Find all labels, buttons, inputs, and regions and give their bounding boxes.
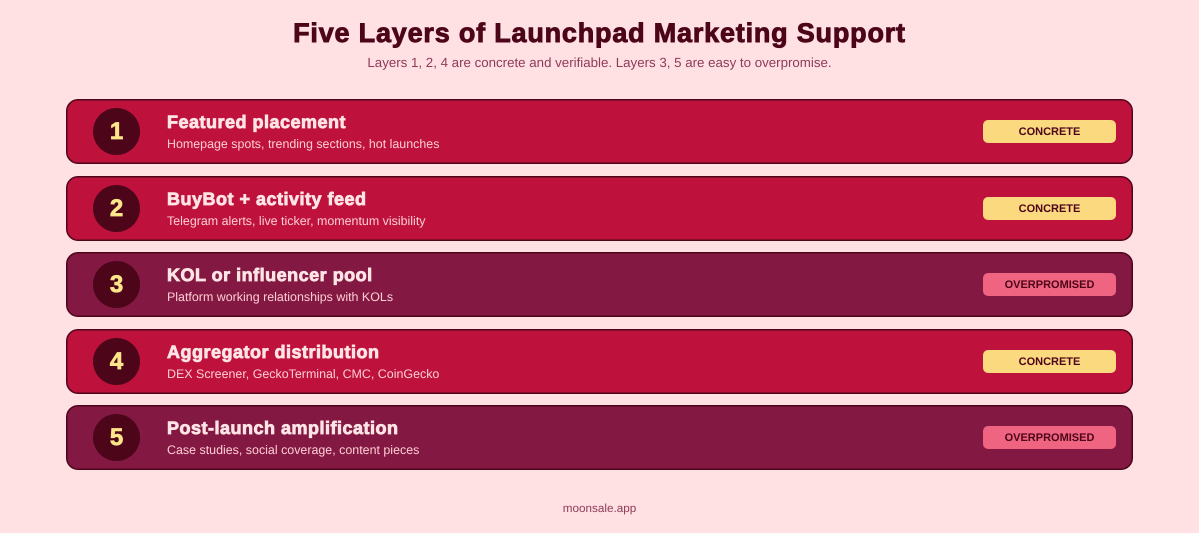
badge: concrete xyxy=(983,120,1116,143)
subtitle: Layers 1, 2, 4 are concrete and verifiable. Layers 3, 5 are easy to overpromise. xyxy=(367,54,832,70)
icon: number 2: 2 xyxy=(110,195,123,222)
panel: layer 5 xyxy=(66,405,1133,470)
heading: layer 1: Featured placement xyxy=(167,112,346,132)
badge: concrete: CONCRETE xyxy=(1019,356,1080,368)
icon: number 1: 1 xyxy=(110,118,123,145)
panel: layer 4 xyxy=(66,329,1133,394)
icon: number 5: 5 xyxy=(110,424,123,451)
panel: layer 2 xyxy=(66,176,1133,241)
heading: layer 2: BuyBot + activity feed xyxy=(167,189,367,209)
icon: number 2 xyxy=(93,185,140,232)
badge: overpromised: OVERPROMISED xyxy=(1005,279,1094,291)
badge: overpromised xyxy=(983,426,1116,449)
text: layer 5 description: Case studies, social coverage, content pieces xyxy=(167,442,419,456)
badge: concrete: CONCRETE xyxy=(1019,126,1080,138)
text: layer 2 description: Telegram alerts, live ticker, momentum visibility xyxy=(167,214,426,228)
icon: number 3: 3 xyxy=(110,271,123,298)
title: Five Layers of Launchpad Marketing Support xyxy=(293,18,906,48)
text: layer 1 description: Homepage spots, trending sections, hot launches xyxy=(167,136,439,150)
badge: concrete xyxy=(983,197,1116,220)
heading: layer 5: Post-launch amplification xyxy=(167,418,399,438)
text: layer 4 description: DEX Screener, GeckoTerminal, CMC, CoinGecko xyxy=(167,366,439,380)
footer: moonsale.app xyxy=(563,502,636,515)
badge: overpromised: OVERPROMISED xyxy=(1005,432,1094,444)
icon: number 5 xyxy=(93,414,140,461)
icon: number 4: 4 xyxy=(110,348,123,375)
panel: layer 1 xyxy=(66,99,1133,164)
icon: number 3 xyxy=(93,261,140,308)
badge: concrete xyxy=(983,350,1116,373)
icon: number 4 xyxy=(93,338,140,385)
badge: overpromised xyxy=(983,273,1116,296)
icon: number 1 xyxy=(93,108,140,155)
heading: layer 4: Aggregator distribution xyxy=(167,342,380,362)
text: layer 3 description: Platform working relationships with KOLs xyxy=(167,290,393,304)
panel: layer 3 xyxy=(66,252,1133,317)
badge: concrete: CONCRETE xyxy=(1019,203,1080,215)
heading: layer 3: KOL or influencer pool xyxy=(167,265,373,285)
